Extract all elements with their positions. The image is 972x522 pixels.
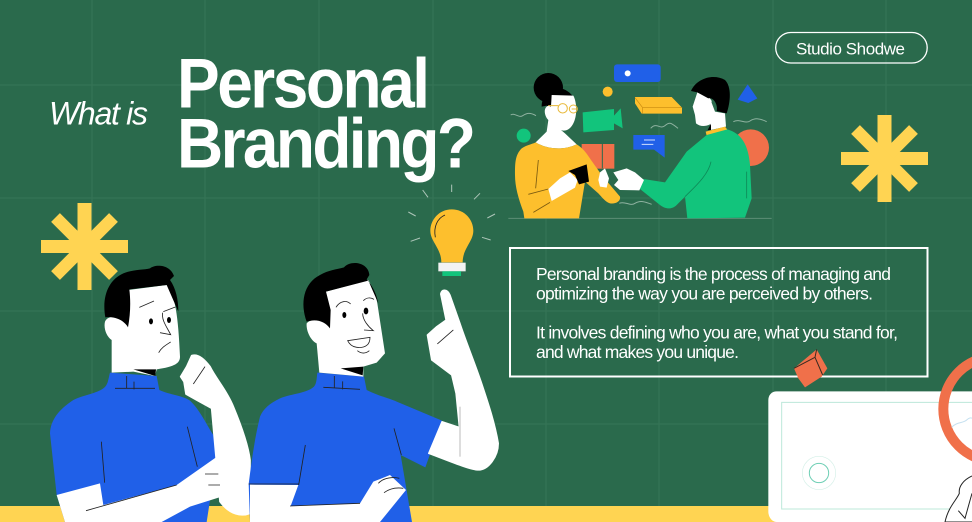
shirt (249, 373, 442, 522)
illustration: confused man (50, 266, 250, 522)
neck and face (536, 95, 577, 148)
icon: asterisk right (841, 115, 928, 202)
hair (303, 263, 378, 328)
hand (945, 476, 972, 522)
title (49, 45, 476, 183)
icon: asterisk left (41, 203, 128, 290)
face (693, 92, 726, 130)
illustration: man with green sweater (613, 77, 752, 218)
icon: light bulb (408, 185, 495, 276)
hand (613, 168, 644, 190)
raised arm (181, 355, 250, 515)
sweater (515, 142, 620, 218)
text panel: definition (510, 248, 928, 376)
cube (794, 349, 827, 387)
floor line (508, 217, 772, 220)
illustration: tablet (768, 349, 972, 522)
title: what is: What is (49, 96, 148, 132)
tablet body (768, 391, 972, 522)
text panel: definition: optimizing the way you are perceived by others. (536, 283, 873, 303)
neck and face (105, 285, 180, 376)
hands and phone (548, 172, 578, 201)
shirt (50, 373, 217, 522)
raised arm (427, 290, 498, 470)
sweater (640, 129, 752, 218)
illustration: scene shapes (508, 64, 772, 218)
lower arm (57, 457, 222, 522)
text panel: definition: It involves defining who you are, what you stand for, (536, 322, 898, 342)
neck and face (307, 280, 385, 377)
target (809, 463, 829, 483)
studio badge (776, 32, 927, 63)
title: personal branding: Personal (177, 45, 430, 123)
studio badge: Studio Shodwe (796, 40, 905, 58)
text panel: definition: and what makes you unique. (536, 342, 739, 362)
hair (691, 77, 730, 113)
smile (348, 337, 370, 348)
illustration: woman (515, 73, 620, 218)
title: personal branding: Branding? (177, 105, 476, 183)
illustration: man with idea (249, 185, 498, 522)
title: personal branding (177, 45, 476, 183)
text panel: definition: Personal branding is the process of managing and (536, 264, 891, 284)
orange ring (943, 357, 972, 461)
yellow ground band (0, 506, 972, 522)
bun and hair (534, 73, 563, 102)
hair (104, 266, 178, 327)
collar (706, 127, 728, 136)
lower arm (250, 475, 406, 522)
